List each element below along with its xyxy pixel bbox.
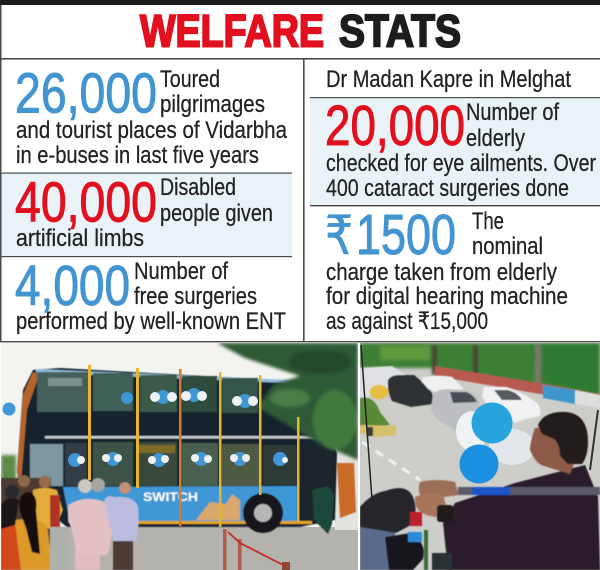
stat: 4,000 surgeries (15, 254, 286, 335)
stat: 1500 nominal charge: nominal (472, 233, 543, 260)
balloons (456, 402, 535, 484)
stat: 20,000 elderly (325, 94, 596, 202)
tree line (360, 343, 600, 396)
stat: 26,000 toured: Toured (160, 66, 220, 93)
stat: 26,000 toured: and tourist places of Vidarbha (16, 117, 288, 144)
title: STATS (339, 6, 461, 56)
stat: 26,000 toured (15, 62, 288, 169)
stat: 26,000 toured: 26,000 (15, 62, 157, 126)
stat: 40,000 disabled: Disabled (160, 174, 236, 201)
photo: double-decker e-bus (0, 343, 358, 570)
stat: 4,000 surgeries: 4,000 (15, 254, 130, 318)
title: WELFARE (140, 6, 324, 56)
top black bar (0, 0, 600, 5)
stat: 4,000 surgeries: Number of (134, 258, 228, 285)
stat: 1500 nominal charge: The (472, 208, 504, 235)
camera (360, 488, 452, 570)
stat: 26,000 toured: in e-buses in last five years (16, 142, 259, 169)
stat: 20,000 elderly: Number of (466, 99, 559, 126)
stat: 1500 nominal charge: charge taken from elderly (326, 259, 557, 286)
photo: man on bus with balloons (360, 343, 600, 570)
stat: 1500 nominal charge: for digital hearing machine (326, 283, 568, 310)
stat: 20,000 elderly: elderly (466, 125, 525, 152)
stat: 4,000 surgeries: performed by well-known ENT (16, 308, 286, 335)
stat: 1500 nominal charge (325, 203, 568, 335)
stat: 20,000 elderly: 20,000 (325, 94, 465, 158)
stat: 26,000 toured: pilgrimages (160, 91, 265, 118)
tree foliage (217, 343, 358, 460)
stat: 4,000 surgeries: free surgeries (134, 283, 257, 310)
stat: 40,000 disabled: 40,000 (15, 170, 157, 234)
shaded row backgrounds (1, 97, 600, 256)
bus livery text: SWITCH (143, 490, 198, 504)
balloon clusters (2, 388, 287, 467)
frame and divider lines (0, 5, 600, 342)
man (415, 412, 600, 570)
stat: 1500 nominal charge: 1500 (356, 203, 456, 267)
stat: 40,000 disabled: people given (160, 200, 273, 227)
stat: 1500 nominal charge: as against ₹15,000 (326, 308, 488, 335)
marigold strings (88, 365, 300, 527)
title (140, 6, 461, 56)
stat: 1500 nominal charge: ₹ (325, 204, 353, 267)
stat: 40,000 disabled: artificial limbs (16, 225, 144, 252)
people in foreground (1, 475, 334, 570)
stat: 40,000 disabled (15, 170, 273, 252)
bus body (17, 368, 356, 533)
rope barrier (223, 529, 290, 570)
street scene (360, 365, 600, 482)
parked cars (422, 376, 464, 395)
